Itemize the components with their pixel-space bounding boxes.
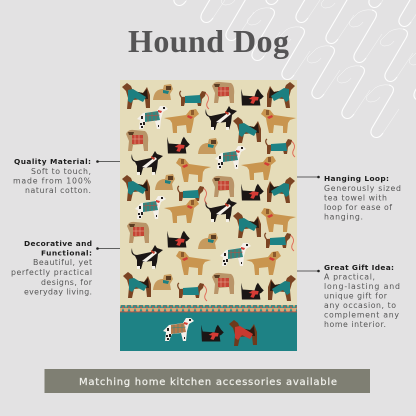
callout: decorative and functional: Decorative and (24, 239, 92, 248)
dog: black and white (131, 151, 163, 175)
panel: tea towel (120, 80, 297, 351)
dog: pug (198, 233, 218, 249)
dog: pug (155, 174, 175, 190)
callout: hanging loop: loop for ease of (324, 203, 392, 212)
dog: airedale (122, 175, 150, 201)
callout: great gift idea: any occasion, to (324, 301, 396, 310)
dog: airedale on band (229, 320, 257, 346)
dog: plaid coat (212, 176, 234, 197)
dog: scottie (167, 137, 190, 154)
dog: airedale (267, 82, 295, 108)
dog: pug (198, 138, 218, 154)
callout: quality material (13, 157, 91, 195)
dog: golden (261, 109, 296, 133)
callout: quality material: Soft to touch, (31, 167, 91, 176)
callout: great gift idea: home interior. (324, 320, 386, 329)
dog: plaid coat (212, 273, 234, 294)
decorative chain pattern (169, 0, 416, 138)
dog: dalmatian (137, 106, 168, 129)
dog: black and white (205, 106, 237, 130)
dog: golden (176, 251, 211, 275)
dog: scottie (167, 231, 190, 248)
dog: airedale (267, 177, 295, 203)
dog: scottie (241, 89, 264, 106)
dog: golden (164, 109, 199, 133)
callout: quality material: natural cotton. (25, 186, 91, 195)
dog: scottie (241, 283, 264, 300)
callout: hanging loop: hanging. (324, 212, 363, 222)
arrow: hanging loop (297, 176, 320, 178)
dog: dachshund (178, 186, 207, 204)
red border line (120, 310, 297, 313)
arrow: decorative and functional (96, 247, 120, 250)
towel patterned border (120, 305, 297, 312)
dog: dachshund (266, 139, 295, 157)
arrow: quality material (96, 160, 120, 163)
dog: golden (176, 158, 211, 182)
dog: scottie on band (201, 325, 224, 342)
dog: dalmatian on band (163, 318, 194, 341)
dog: scottie (241, 184, 264, 201)
callout: decorative and functional: perfectly practical (11, 268, 92, 277)
callout: great gift idea: Great Gift Idea: (324, 263, 394, 272)
dog: black and white (131, 245, 163, 269)
dog: golden (241, 156, 276, 180)
dog: dachshund (178, 283, 207, 301)
callout: decorative and functional: Beautiful, yet (33, 258, 92, 267)
dog: pug (153, 84, 173, 100)
callout: hanging loop (324, 174, 401, 222)
dog: golden (261, 208, 296, 232)
callout: hanging loop: tea towel with (324, 194, 387, 202)
towel teal band (120, 311, 297, 351)
callout: quality material: made from 100% (13, 176, 91, 186)
dog: airedale (268, 275, 296, 301)
dog: dalmatian (220, 243, 251, 266)
dog: dachshund (180, 91, 209, 109)
callout: quality material: Quality Material: (14, 157, 91, 166)
dog: dalmatian (135, 196, 166, 219)
callout: great gift idea: A practical, (324, 272, 375, 282)
dog: plaid coat (127, 222, 149, 243)
dog: airedale (233, 117, 261, 143)
banner (44, 369, 370, 393)
dog: golden (164, 199, 199, 223)
towel cream fabric (120, 80, 297, 351)
arrow: great gift idea (297, 270, 320, 272)
dog: plaid coat (212, 82, 234, 103)
dog: airedale (233, 212, 261, 238)
dog: dalmatian (215, 146, 246, 169)
callout: decorative and functional: everyday living. (24, 288, 92, 296)
dog: dachshund (265, 233, 294, 251)
callout: hanging loop: Generously sized (324, 184, 401, 193)
dog: plaid coat (126, 130, 148, 151)
banner: Matching home kitchen accessories available (79, 377, 337, 388)
dog: airedale (122, 83, 150, 109)
title: Hound Dog (128, 23, 289, 59)
callout: great gift idea: unique gift for (324, 292, 388, 300)
callout: decorative and functional: designs, for (41, 278, 93, 287)
callout: great gift idea: long-lasting and (324, 282, 400, 291)
dog: black and white (205, 198, 237, 222)
callout: great gift idea: complement any (324, 310, 399, 320)
callout: hanging loop: Hanging Loop: (324, 174, 389, 183)
dog: airedale (123, 272, 151, 298)
callout: great gift idea (324, 263, 400, 329)
dog: golden (246, 251, 281, 275)
dog: pug (153, 274, 173, 290)
callout: decorative and functional (11, 239, 93, 296)
callout: decorative and functional: Functional: (41, 248, 92, 258)
